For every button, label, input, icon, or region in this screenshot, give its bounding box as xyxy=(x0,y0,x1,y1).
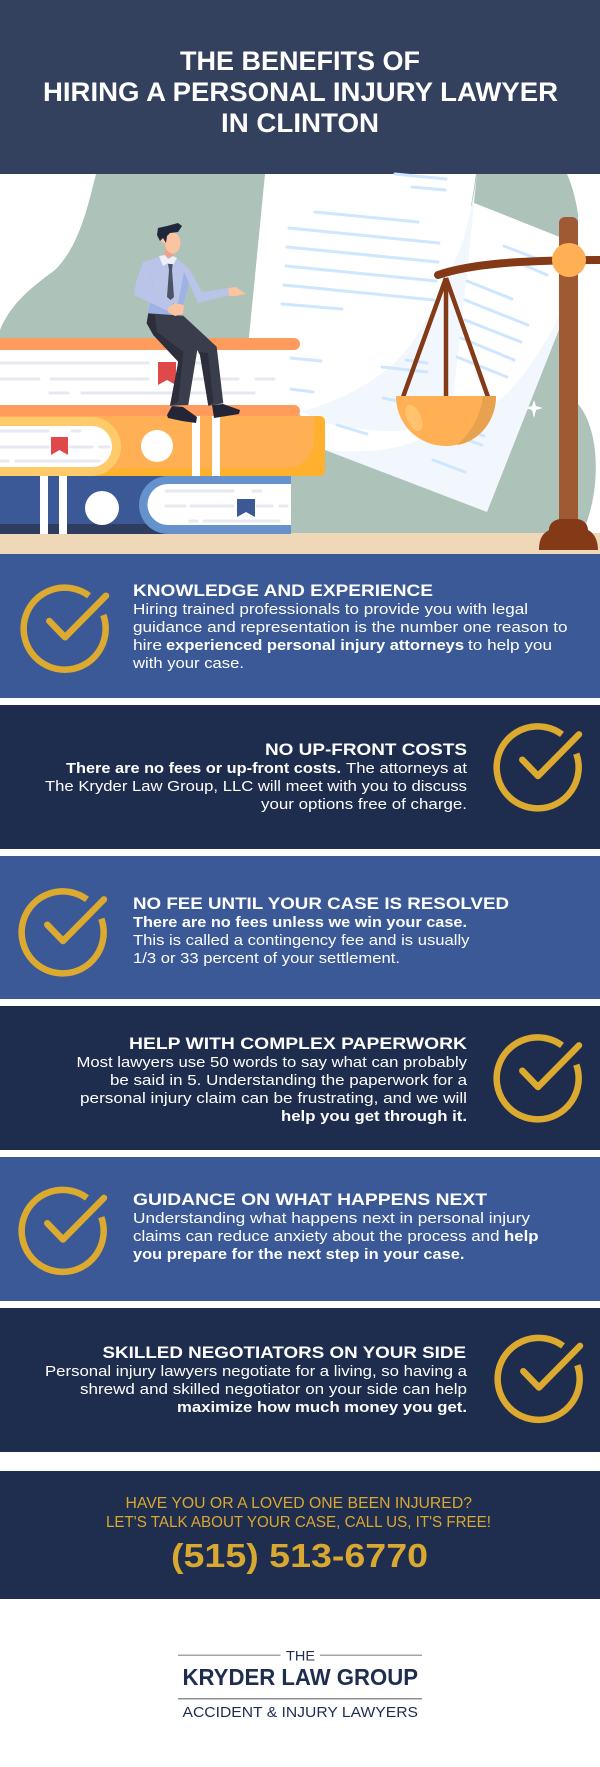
body text xyxy=(133,1210,538,1263)
middle book xyxy=(0,416,325,476)
body text: There are no fees or up-front costs. xyxy=(66,760,341,777)
icon: check circle xyxy=(22,1190,104,1272)
phone number: (515) 513-6770 xyxy=(171,1537,428,1574)
sparkle xyxy=(525,400,543,418)
header panel xyxy=(0,0,600,174)
paper text lines xyxy=(282,174,547,472)
beige floor xyxy=(0,533,600,554)
heading: GUIDANCE ON WHAT HAPPENS NEXT xyxy=(133,1190,488,1209)
body text: personal injury claim can be frustrating, and we will xyxy=(80,1090,467,1107)
sage background blob xyxy=(0,174,596,534)
body text: your options free of charge. xyxy=(261,796,467,813)
body text: 1/3 or 33 percent of your settlement. xyxy=(133,950,400,967)
body text: guidance and representation is the number one reason to xyxy=(133,619,568,636)
body text: There are no fees unless we win your case. xyxy=(133,914,467,931)
body text: help xyxy=(504,1228,538,1245)
body text xyxy=(76,1054,468,1125)
body text: Hiring trained professionals to provide you with legal xyxy=(133,601,528,618)
logo: the kryder law group xyxy=(178,1648,422,1721)
logo: the kryder law group: ACCIDENT & INJURY LAWYERS xyxy=(182,1705,418,1721)
body text: This is called a contingency fee and is usually xyxy=(133,932,470,949)
body text: claims can reduce anxiety about the process and xyxy=(133,1228,500,1245)
body text: hire xyxy=(133,637,162,654)
call to action text: LET'S TALK ABOUT YOUR CASE, CALL US, IT'S FREE! xyxy=(106,1514,491,1531)
heading: NO FEE UNTIL YOUR CASE IS RESOLVED xyxy=(133,894,509,913)
body text xyxy=(133,914,470,967)
icon: check circle xyxy=(497,1037,579,1119)
heading: NO UP-FRONT COSTS xyxy=(265,740,467,759)
body text: shrewd and skilled negotiator on your side can help xyxy=(80,1381,467,1398)
top book xyxy=(0,338,300,417)
scales of justice xyxy=(396,217,600,550)
panel: guidance on what happens next xyxy=(0,1157,600,1301)
heading: KNOWLEDGE AND EXPERIENCE xyxy=(133,581,433,600)
body text: you prepare for the next step in your case. xyxy=(133,1246,464,1263)
body text xyxy=(132,601,568,672)
body text: The Kryder Law Group, LLC will meet with you to discuss xyxy=(45,778,467,795)
panel: call to action xyxy=(0,1471,600,1599)
body text: Understanding what happens next in personal injury xyxy=(133,1210,531,1227)
man: neck and head xyxy=(157,223,182,258)
icon: check circle xyxy=(498,1338,580,1420)
heading: SKILLED NEGOTIATORS ON YOUR SIDE xyxy=(102,1343,466,1362)
man: collar and tie xyxy=(159,255,177,300)
illustration: lawyer on books with scales xyxy=(0,174,600,554)
body text: Personal injury lawyers negotiate for a living, so having a xyxy=(45,1363,468,1380)
body text: The attorneys at xyxy=(346,760,468,777)
body text: help you get through it. xyxy=(281,1108,467,1125)
icon: check circle xyxy=(22,891,104,973)
title xyxy=(43,46,558,138)
title: HIRING A PERSONAL INJURY LAWYER xyxy=(43,77,558,107)
body text: Most lawyers use 50 words to say what can probably xyxy=(76,1054,468,1071)
man: shirt xyxy=(134,257,230,315)
body text: with your case. xyxy=(132,655,244,672)
bottom book xyxy=(0,476,291,534)
body text xyxy=(45,760,468,813)
title: IN CLINTON xyxy=(221,108,379,138)
logo: the kryder law group: THE xyxy=(286,1648,315,1664)
logo: the kryder law group: KRYDER LAW GROUP xyxy=(182,1664,418,1690)
body text: maximize how much money you get. xyxy=(177,1399,467,1416)
panel: knowledge and experience xyxy=(0,554,600,698)
call to action text: HAVE YOU OR A LOVED ONE BEEN INJURED? xyxy=(126,1495,472,1512)
body text: be said in 5. Understanding the paperwork for a xyxy=(110,1072,468,1089)
body text: to help you xyxy=(468,637,552,654)
panel: no up-front costs xyxy=(0,705,600,849)
heading: HELP WITH COMPLEX PAPERWORK xyxy=(129,1034,468,1053)
panel: skilled negotiators xyxy=(0,1308,600,1452)
body text xyxy=(45,1363,468,1416)
panel: no fee until resolved xyxy=(0,856,600,999)
sitting man xyxy=(134,223,246,423)
icon: check circle xyxy=(24,588,106,670)
back paper sheet xyxy=(240,174,562,512)
man: trousers xyxy=(147,313,223,406)
man: hands xyxy=(168,287,246,316)
body text: experienced personal injury attorneys xyxy=(166,637,464,654)
man: shoes xyxy=(167,404,240,423)
call to action text xyxy=(106,1495,491,1531)
title: THE BENEFITS OF xyxy=(180,46,420,76)
icon: check circle xyxy=(497,726,579,808)
panel: complex paperwork xyxy=(0,1006,600,1150)
